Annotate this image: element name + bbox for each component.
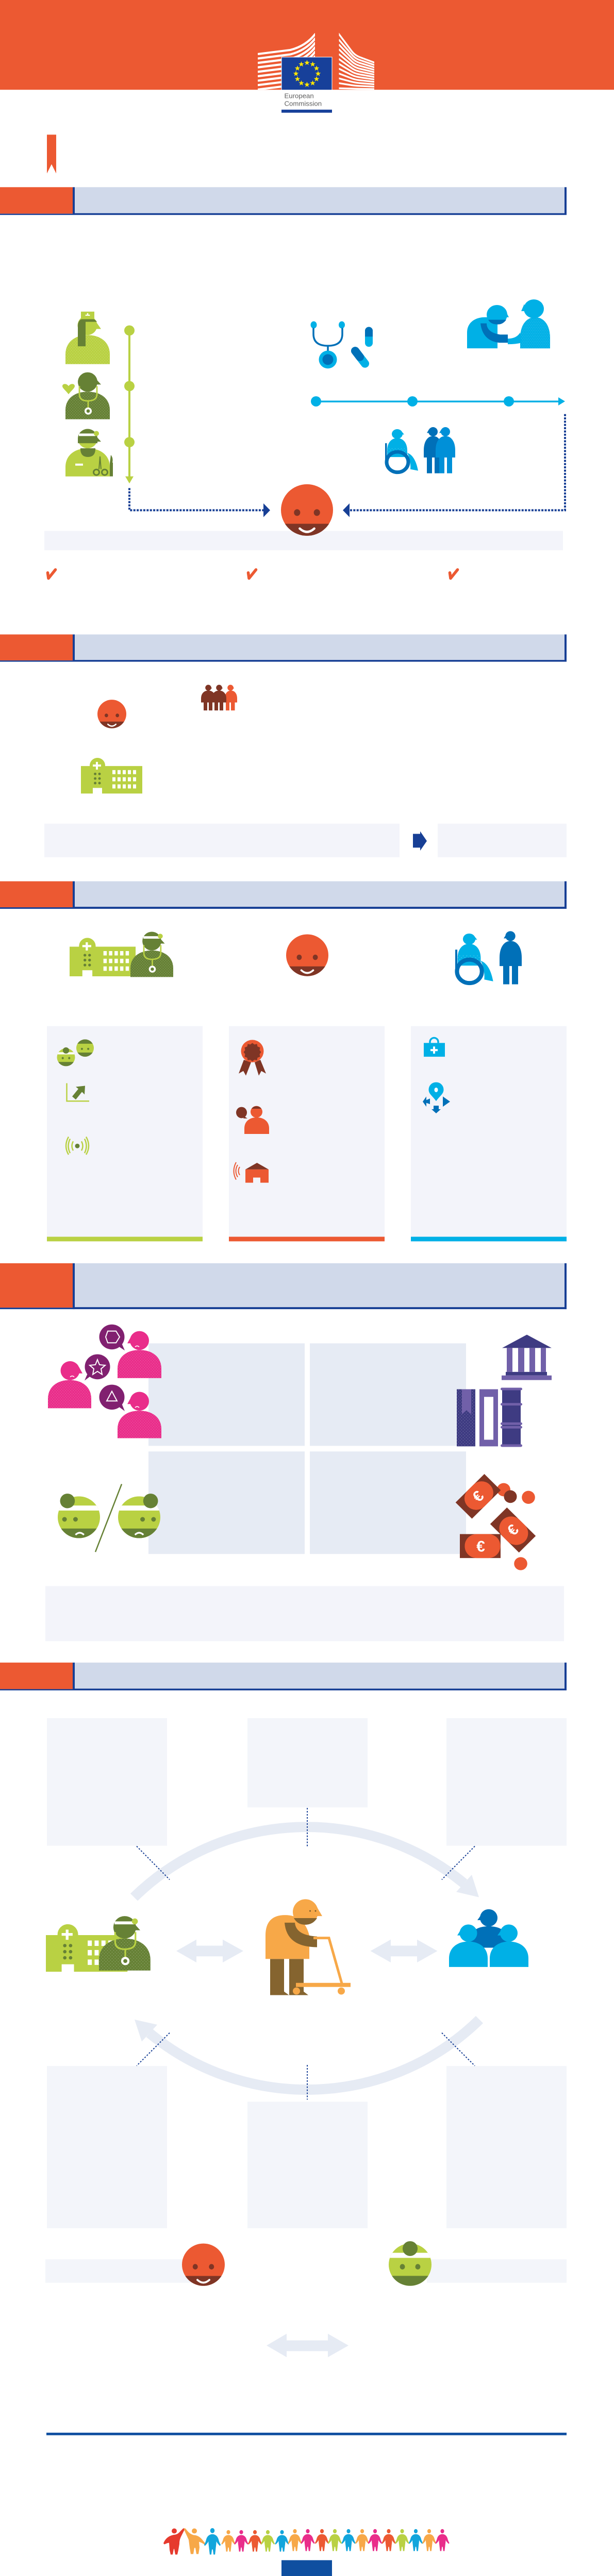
icon: small face: [97, 700, 126, 728]
icon: banknotes and coins: [456, 1474, 536, 1570]
footer blue tab: [281, 2560, 332, 2576]
icon: books: [457, 1388, 522, 1447]
header banner: [0, 0, 614, 113]
double arrow left: [176, 1940, 243, 1962]
European Commission logo: Commission: [285, 100, 322, 108]
section header 3: [0, 882, 567, 909]
icon: doctor with heart: [62, 372, 110, 419]
icon: two sad faces with divider: [58, 1484, 160, 1552]
section header 5: [0, 1663, 567, 1690]
icon: hospital: [81, 758, 142, 793]
check mark 2: [248, 570, 256, 579]
panel: grid top left: [148, 1343, 305, 1446]
panel: centre column: [229, 1026, 385, 1241]
face right: [118, 1494, 160, 1539]
icon: medical bag: [424, 1038, 445, 1057]
dotted arrow right to patient: [343, 414, 565, 517]
panel: right column: [411, 1026, 567, 1241]
person left: [48, 1354, 110, 1408]
panel: left column: [47, 1026, 203, 1241]
icon: wheelchair user and couple: [385, 427, 455, 473]
icon: elderly person with walker: [265, 1899, 351, 1995]
check mark 1: [47, 570, 56, 579]
icon: stethoscope: [310, 321, 345, 368]
icon: signal waves: [66, 1137, 89, 1155]
strip left: [45, 2259, 196, 2283]
panel: grid top right: [310, 1343, 466, 1446]
summary strip: [45, 1586, 564, 1641]
icon: pills: [355, 327, 373, 364]
bookmark icon: [47, 134, 56, 174]
face left: [58, 1494, 100, 1539]
box bottom right: [446, 2066, 567, 2228]
double arrow: [267, 2334, 349, 2357]
icon: rising chart: [67, 1083, 89, 1101]
green timeline arrow: [124, 326, 135, 483]
icon: wheelchair user and person: [455, 931, 522, 985]
cyan timeline arrow: [311, 396, 565, 406]
section header 1: [0, 187, 567, 215]
box bottom left: [47, 2066, 167, 2228]
check mark 3: [450, 570, 458, 579]
text strip left: [44, 824, 400, 857]
icon: two staff faces: [57, 1039, 94, 1066]
European Commission logo: European: [285, 92, 314, 100]
icon: award ribbon: [239, 1040, 266, 1076]
icon: people with speech bubbles: [48, 1325, 161, 1438]
icon: carer and patient: [467, 299, 550, 348]
divider rule: [46, 2433, 567, 2435]
icon: connected house: [234, 1162, 269, 1183]
panel: grid bottom right: [310, 1451, 466, 1554]
section header 2: [0, 634, 567, 662]
box top left: [47, 1718, 167, 1845]
icon: location pin with arrows: [423, 1082, 450, 1113]
caption strip: [44, 531, 563, 550]
icon: happy patient face: [281, 484, 333, 536]
European Commission logo: [258, 33, 375, 113]
text strip right: [438, 824, 567, 857]
icon: banknotes and coins: €: [476, 1538, 485, 1555]
dotted arrow left to patient: [129, 488, 270, 517]
person top right: [99, 1325, 161, 1378]
dotted connectors: [137, 1808, 475, 2099]
icon: nurse: [65, 312, 110, 364]
icon: surgeon: [65, 429, 113, 477]
icon: group of people: [449, 1909, 528, 1967]
top curved arrow: [134, 1827, 479, 1897]
strip right: [427, 2259, 567, 2283]
section header 4: [0, 1263, 567, 1309]
box top right: [446, 1718, 567, 1845]
icon: happy face: [182, 2244, 225, 2286]
bottom curved arrow: [135, 2020, 479, 2090]
icon: banknotes and coins: €: [469, 1487, 488, 1505]
box top centre: [247, 1718, 368, 1807]
icon: hospital and doctor: [70, 932, 173, 977]
double arrow right: [370, 1940, 437, 1962]
box bottom centre: [247, 2102, 368, 2228]
arrow: [413, 832, 427, 851]
panel: grid bottom left: [148, 1451, 305, 1554]
icon: person speaking: [236, 1106, 269, 1134]
icon: bank building: [502, 1335, 552, 1380]
icon: staff face: [389, 2241, 432, 2286]
people chain: [163, 2528, 450, 2554]
person bottom right: [99, 1385, 161, 1438]
icon: three people: [201, 685, 237, 710]
icon: patient face: [286, 935, 328, 976]
icon: banknotes and coins: €: [504, 1521, 522, 1539]
icon: hospital and doctor: [46, 1916, 151, 1972]
